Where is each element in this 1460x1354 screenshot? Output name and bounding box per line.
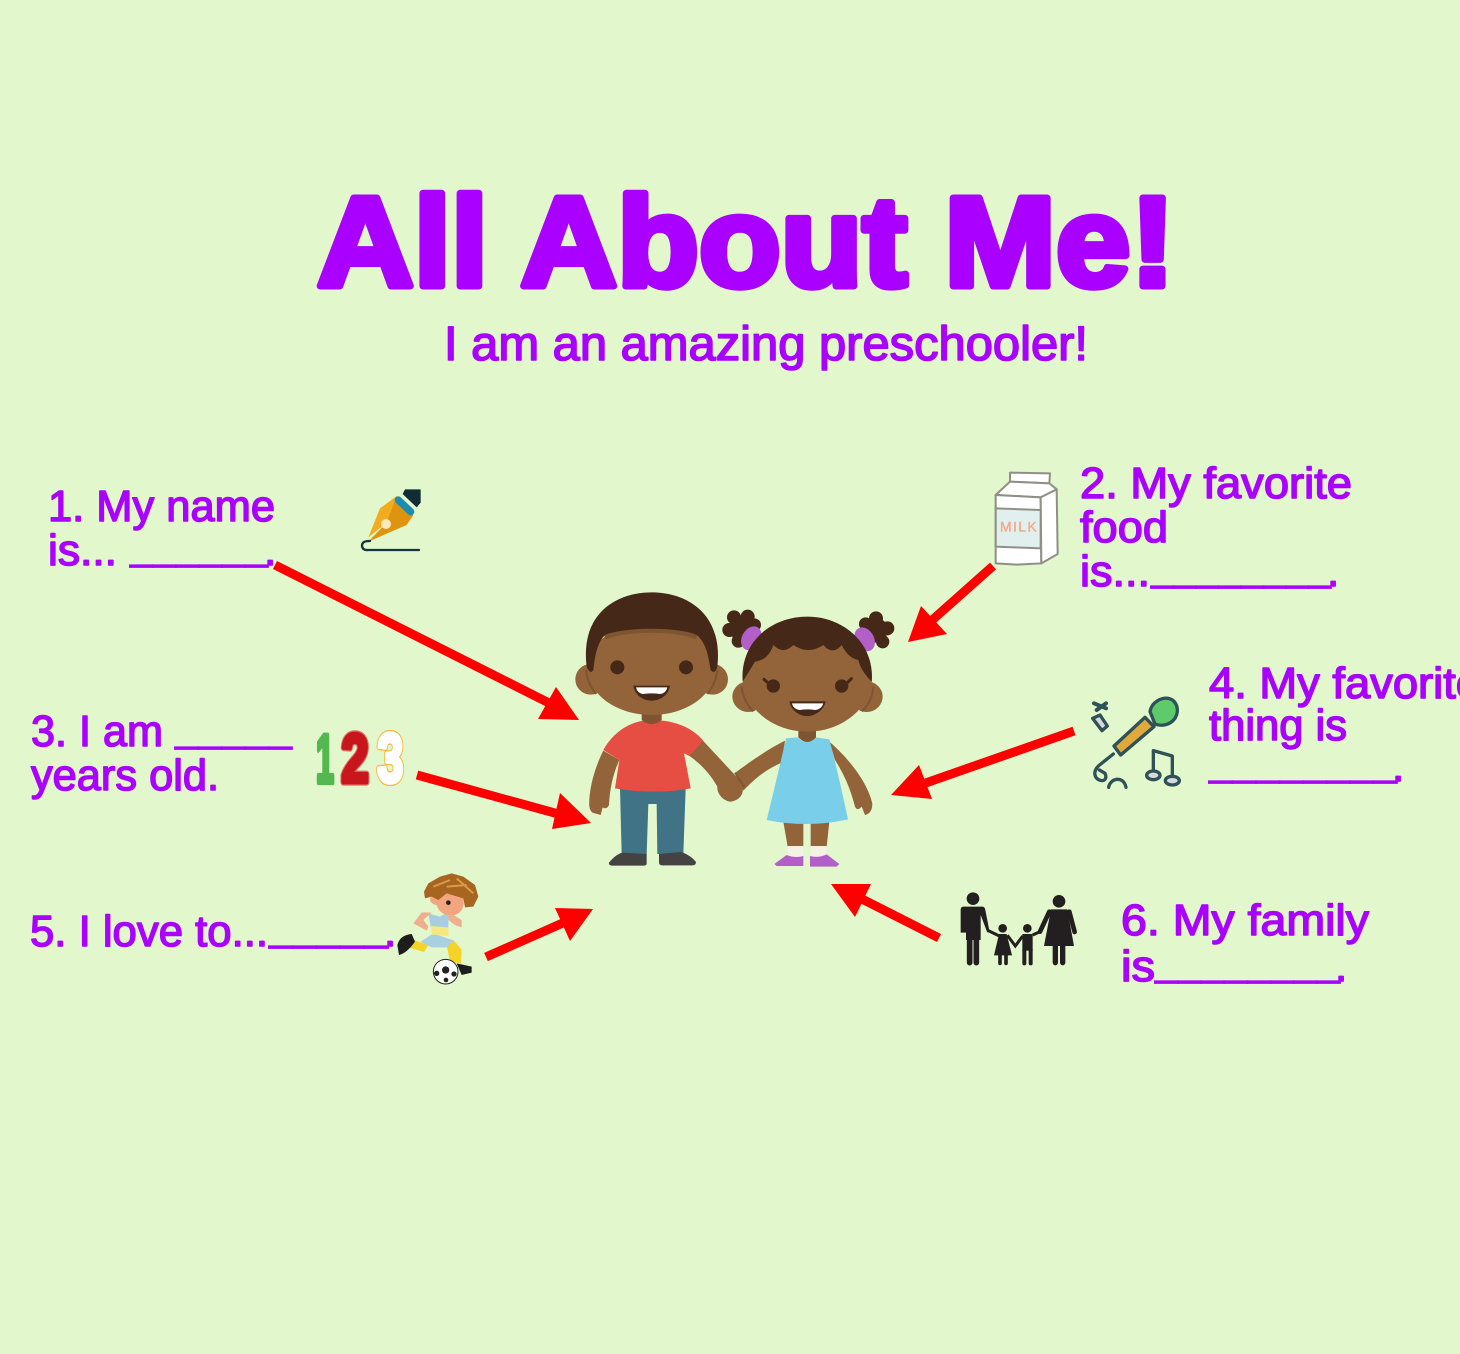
boy (575, 592, 743, 866)
father (961, 892, 989, 963)
prompt 1: name: 1. My name (48, 482, 275, 531)
prompt 2: favorite food: is... (1080, 547, 1150, 596)
prompt 2: favorite food: . (1327, 547, 1339, 596)
prompt 1: name: . (264, 526, 276, 575)
arrow 1 (275, 565, 579, 720)
title: All About Me! (317, 171, 1175, 314)
icon: numbers 123: 2 (341, 721, 369, 797)
prompt 6: family: 6. My family (1121, 896, 1369, 945)
arrow 6 (831, 884, 939, 938)
prompt 3: age: years old. (31, 751, 219, 800)
prompt 2: favorite food: food (1080, 503, 1168, 552)
icon: milk carton (996, 473, 1058, 565)
prompt 3: age: 3. I am (31, 707, 163, 756)
arrow 3 (417, 775, 591, 829)
subtitle: I am an amazing preschooler! (444, 318, 1088, 371)
prompt 6: family: is (1121, 942, 1155, 991)
icon: numbers 123: 2 (341, 721, 369, 797)
prompt 3: age (31, 702, 293, 800)
illustration: two children holding hands (575, 592, 894, 867)
prompt 4: favorite thing: . (1392, 742, 1404, 791)
prompt 6: family (1121, 896, 1369, 991)
prompt 5: love to: 5. I love to... (30, 907, 268, 956)
prompt 5: love to: . (384, 907, 396, 956)
prompt 5: love to (30, 901, 396, 956)
mother (1040, 895, 1075, 963)
icon: numbers 123: 3 (377, 720, 403, 796)
prompt 2: favorite food: 2. My favorite (1080, 459, 1352, 508)
prompt 4: favorite thing: thing is (1209, 701, 1347, 750)
prompt 1: name: is... (48, 526, 117, 575)
children (988, 924, 1041, 963)
prompt 4: favorite thing (1208, 659, 1460, 791)
prompt 5: love to: _____ (268, 901, 389, 950)
arrow 4 (891, 731, 1074, 799)
icon: numbers 123: 3 (377, 720, 403, 796)
icon: boy playing soccer (397, 873, 478, 984)
arrow 5 (486, 908, 593, 957)
prompt 6: family: . (1335, 942, 1347, 991)
prompt 2: favorite food: ________ (1150, 541, 1331, 590)
prompt 2: favorite food (1080, 459, 1352, 596)
prompt 1: name (48, 482, 276, 575)
prompt 3: age: _____ (174, 702, 293, 751)
icon: fountain pen (362, 489, 421, 550)
girl (722, 610, 894, 867)
icon: microphone and music notes (1093, 698, 1179, 787)
prompt 6: family: ________ (1154, 936, 1341, 985)
arrow 2 (908, 566, 993, 642)
icon: numbers 123: 1 (316, 722, 334, 798)
icon: family silhouette (961, 892, 1075, 963)
prompt 1: name: ______ (129, 520, 268, 569)
milk label: MILK (1000, 519, 1037, 535)
icon: numbers 123 (316, 720, 403, 798)
prompt 4: favorite thing: ________ (1208, 736, 1398, 785)
